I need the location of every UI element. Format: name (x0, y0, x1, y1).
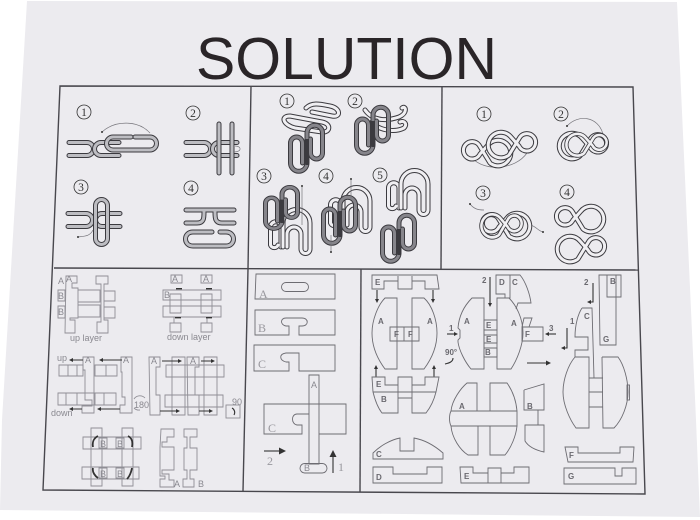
exploded group centre (445, 275, 556, 369)
rotation row left: down (51, 408, 73, 418)
exploded group centre: 1 (449, 324, 454, 333)
step 4: 4 (188, 183, 194, 195)
down layer diagram: A (172, 274, 178, 284)
down layer diagram (163, 274, 221, 342)
panel: top middle hook puzzle (257, 94, 428, 261)
exploded group left: E (375, 278, 381, 287)
exploded group centre: D (499, 278, 505, 287)
assembled B blocks: B (117, 439, 123, 449)
exploded group left: F (394, 330, 399, 339)
assembled B blocks (82, 428, 141, 486)
arrow 2 (264, 448, 286, 468)
rotate 180 icon: 180 (134, 400, 149, 410)
step 1: 1 (284, 96, 290, 108)
step 3: 3 (480, 188, 486, 200)
rotation row left: up (57, 353, 67, 363)
panel: top right loop puzzle (463, 107, 607, 262)
step 3 (469, 186, 544, 239)
assembled B blocks: B (100, 469, 106, 479)
exploded group centre: 90° (445, 348, 457, 357)
step 2: 2 (352, 96, 358, 108)
rotation row left: A (123, 355, 129, 365)
assembled group right: C (584, 312, 590, 321)
exploded group centre: F (525, 330, 530, 339)
assembled B blocks: B (117, 469, 123, 479)
up layer diagram: B (58, 291, 64, 301)
step 4 (319, 169, 370, 253)
step 2: 2 (190, 108, 196, 120)
step 1: 1 (481, 109, 487, 121)
pieces C and D (373, 438, 443, 483)
exploded group centre: C (512, 278, 518, 287)
exploded group left: A (378, 317, 384, 326)
pieces group bottom centre: E (464, 472, 470, 481)
assembled B blocks: B (100, 439, 106, 449)
up layer diagram: B (58, 307, 64, 317)
assembled plates: C (268, 421, 276, 435)
exploded group left: F (408, 330, 413, 339)
arrow 2: 2 (267, 454, 273, 468)
arrow 1 (330, 450, 344, 474)
pieces C and D: D (376, 473, 382, 482)
exploded group centre: E (486, 335, 492, 344)
separated pieces A and B: A (174, 479, 180, 489)
assembled group right (561, 275, 630, 428)
exploded group centre: E (486, 321, 492, 330)
pieces F and G: F (569, 451, 574, 460)
down layer diagram: B (164, 290, 170, 300)
assembled plates (264, 375, 346, 473)
assembled group right: G (603, 335, 609, 344)
up layer diagram: A (58, 276, 64, 286)
step 1 (280, 94, 339, 171)
rotate 90 icon (226, 397, 242, 418)
step 1 (69, 105, 156, 156)
title: SOLUTION (196, 26, 497, 92)
step 2 (348, 94, 406, 153)
panel: bottom right block puzzle (372, 275, 636, 484)
step 3 (68, 180, 120, 244)
panel: bottom middle slotted plates (254, 274, 346, 474)
exploded group centre: A (464, 317, 470, 326)
step 1 (463, 107, 536, 167)
step 4: 4 (564, 187, 570, 199)
step 4 (184, 181, 234, 246)
rotation row right: A (151, 356, 157, 366)
rotate 90 icon: 90 (232, 397, 242, 407)
up layer diagram: up layer (70, 333, 102, 343)
step 5 (373, 168, 428, 261)
separated pieces A and B (160, 429, 204, 489)
exploded group centre: 3 (549, 324, 554, 333)
down layer diagram: down layer (167, 332, 211, 342)
exploded group centre: 2 (482, 276, 487, 285)
exploded group centre: A (511, 319, 517, 328)
pieces group bottom centre (450, 383, 544, 483)
step 4 (556, 185, 605, 262)
assembled plates: B (304, 463, 310, 473)
exploded group left: E (376, 380, 382, 389)
arrow 1: 1 (338, 460, 344, 474)
separated pieces A and B: B (198, 479, 204, 489)
panel frame (43, 86, 645, 494)
pieces F and G: G (568, 472, 574, 481)
assembled group right: B (610, 277, 616, 286)
rotation row left: A (85, 355, 91, 365)
rotate 180 icon (134, 396, 149, 410)
rotation row right: A (190, 356, 196, 366)
pieces F and G (564, 447, 636, 484)
assembled group right: 1 (570, 317, 575, 326)
pieces C and D: C (376, 450, 382, 459)
step 2 (186, 106, 240, 173)
plate B: B (258, 321, 266, 335)
rotation row right (149, 356, 224, 415)
pieces group bottom centre: A (459, 402, 465, 411)
step 5: 5 (377, 170, 383, 182)
up layer diagram: A (66, 274, 72, 284)
step 3 (257, 169, 310, 253)
rotation row left (51, 353, 132, 418)
step 1: 1 (81, 107, 87, 119)
step 3: 3 (261, 171, 267, 183)
plate A: A (259, 287, 268, 301)
plate B (255, 310, 335, 335)
pieces group bottom centre: B (527, 402, 533, 411)
exploded group left: B (381, 395, 387, 404)
panel: bottom left block puzzle (51, 274, 242, 489)
exploded group left: A (427, 317, 433, 326)
assembled plates: A (311, 380, 317, 390)
step 3: 3 (78, 182, 84, 194)
plate C: C (258, 357, 266, 371)
plate A (255, 274, 335, 301)
down layer diagram: A (203, 274, 209, 284)
panel: top left chain puzzle (68, 105, 240, 246)
exploded group centre: B (485, 348, 491, 357)
plate C (254, 345, 335, 371)
assembled group right: 2 (584, 278, 589, 287)
step 2: 2 (558, 109, 564, 121)
step 4: 4 (323, 171, 329, 183)
step 2 (554, 107, 607, 159)
exploded group left (372, 275, 439, 413)
up layer diagram (58, 274, 115, 343)
